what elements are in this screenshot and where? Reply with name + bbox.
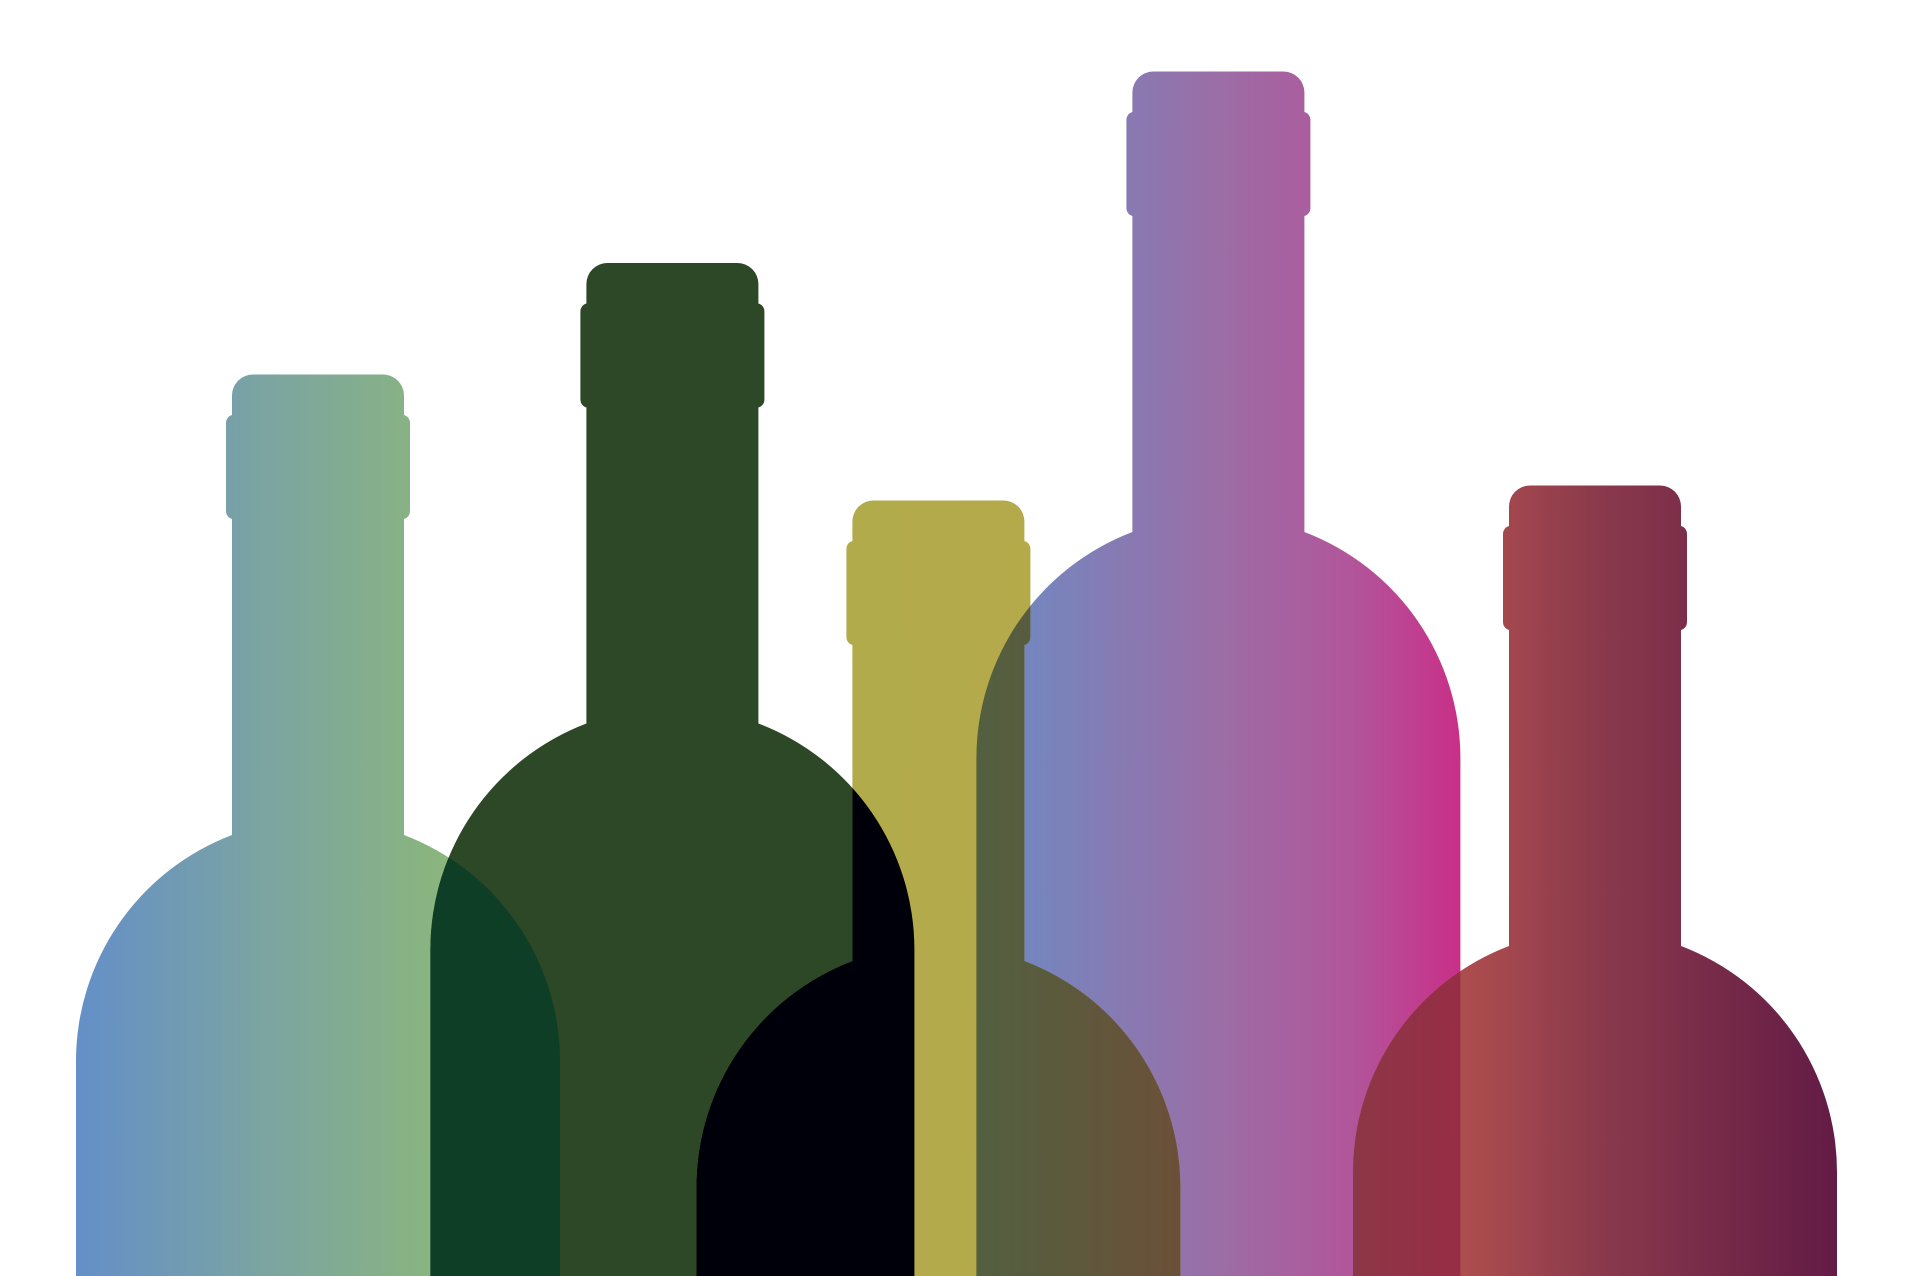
overlap: bottle 3 and bottle 4 <box>976 606 1180 1276</box>
bottle 4: periwinkle to magenta <box>976 72 1460 1276</box>
bottle 2: dark green <box>430 263 914 1276</box>
bottle 3: mustard yellow <box>696 500 1180 1276</box>
overlap: bottle 1 and bottle 2 <box>430 858 560 1276</box>
overlap: bottle 4 and bottle 5 <box>1353 971 1460 1276</box>
overlap: bottle 2 and bottle 3 <box>696 788 914 1276</box>
bottle 5: red to plum <box>1353 486 1837 1276</box>
bottle 1: blue to green <box>76 374 560 1276</box>
